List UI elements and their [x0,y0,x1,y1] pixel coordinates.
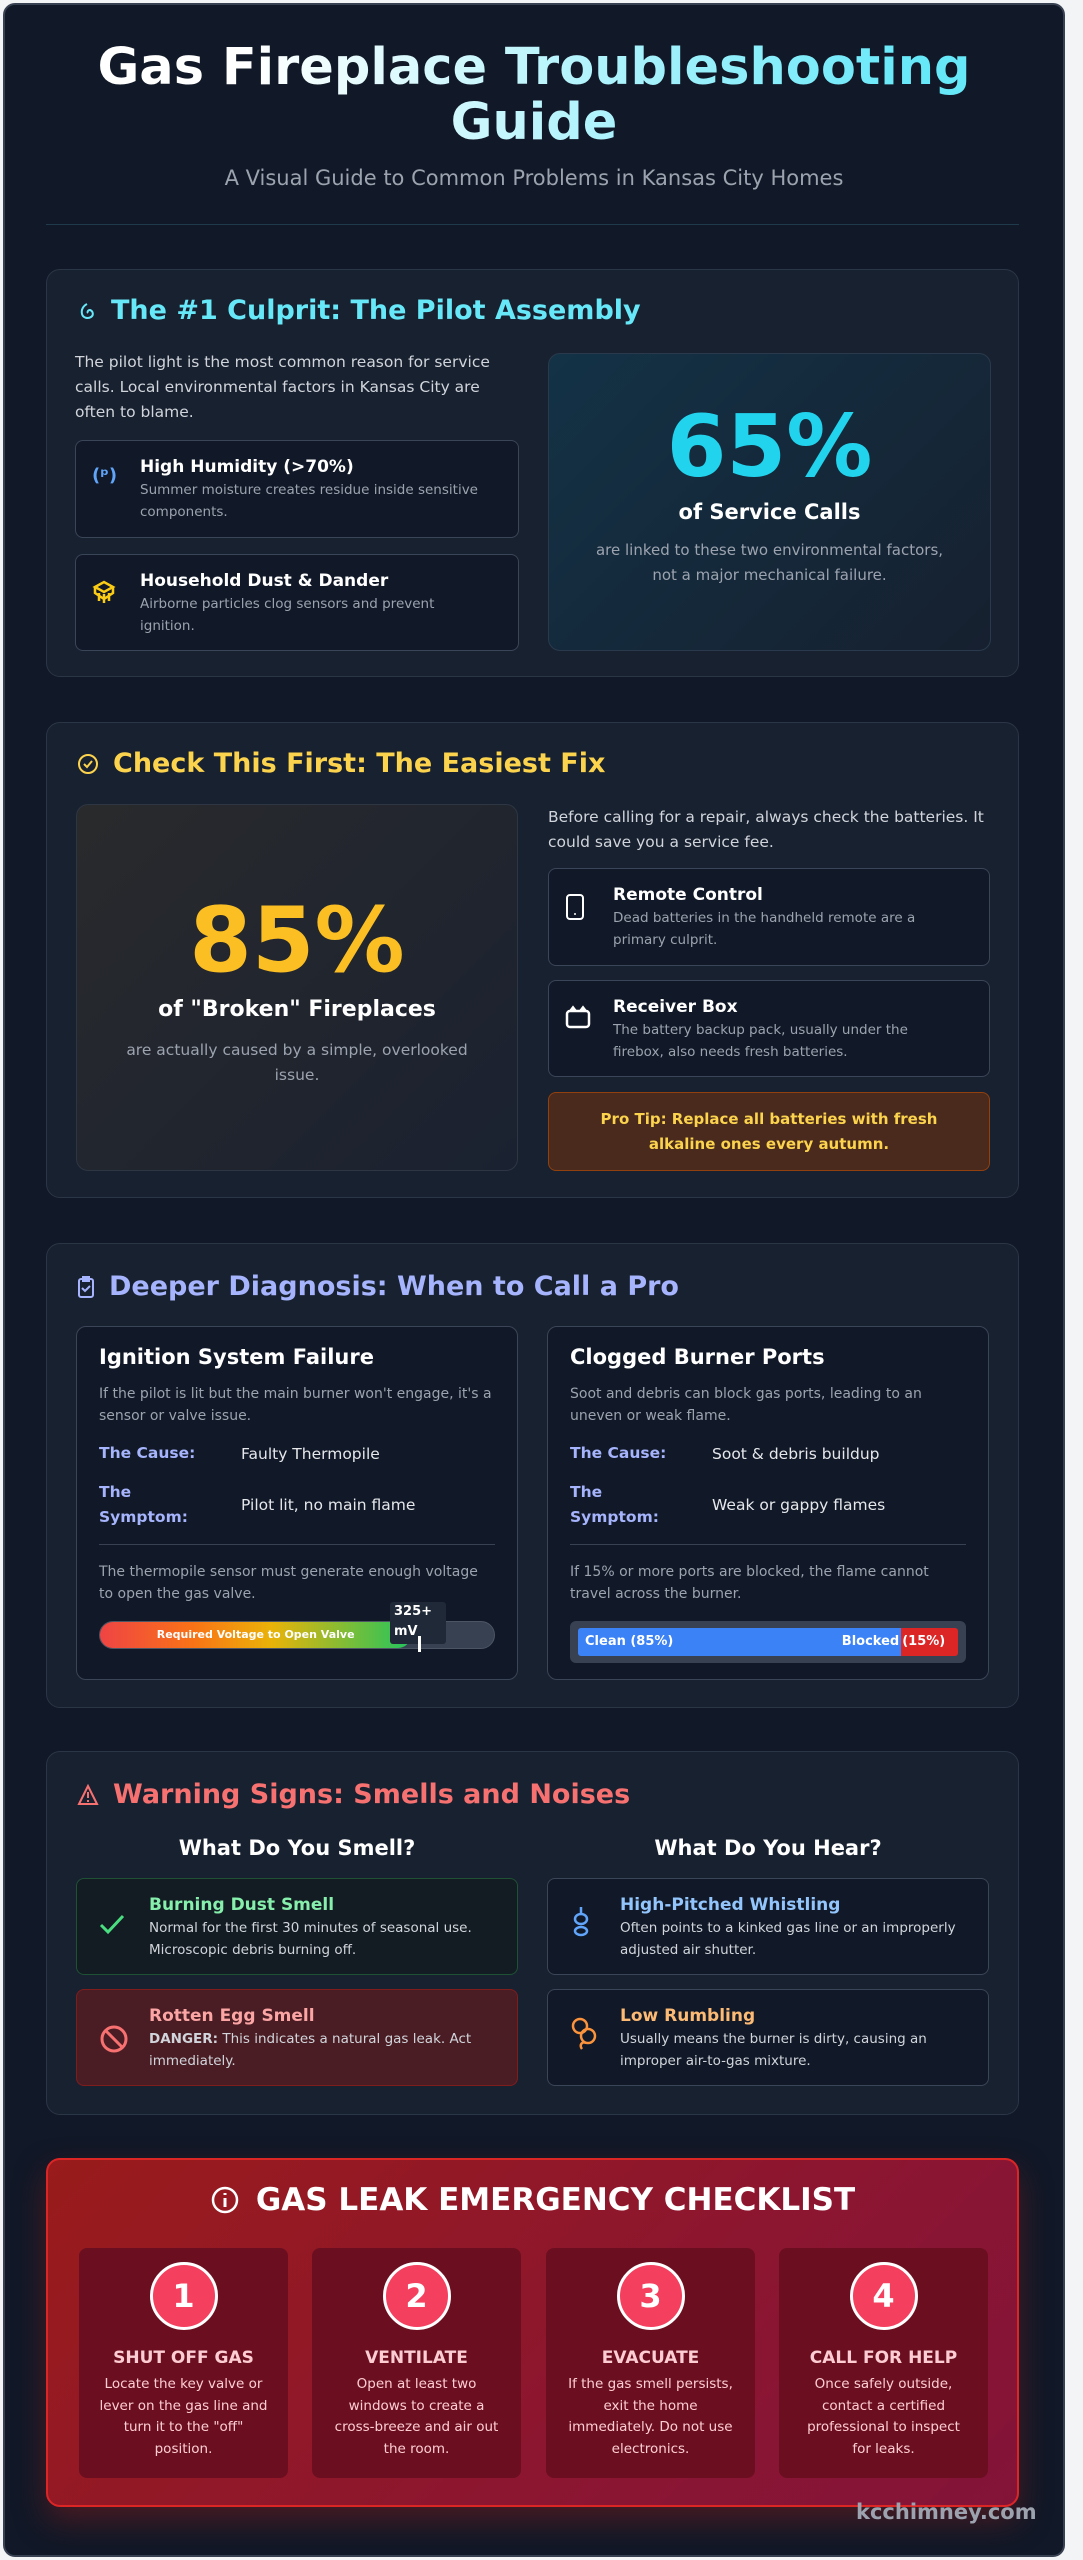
step 4: 4 [872,2277,895,2315]
chart: port blockage bar: (15%) [902,1634,945,1649]
subheading: hear: What Do You Hear? [654,1836,882,1860]
card: dust: Airborne particles clog sensors and prevent ignition. [140,596,434,634]
heading: deeper diagnosis: Deeper Diagnosis: When to Call a Pro [109,1271,679,1302]
card: clogged burner: Symptom: [570,1508,659,1526]
card: humidity: High Humidity (>70%) [140,457,354,477]
card: dust: Household Dust & Dander [140,571,388,591]
card: rotten egg: Rotten Egg Smell [149,2006,315,2026]
stat: 85%: 85% [189,888,405,993]
card: ignition failure: If the pilot is lit but the main burner won't engage, it's a sensor or valve issue. [99,1386,492,1424]
card: rumbling: Low Rumbling [620,2006,755,2026]
callout: pro tip: Pro Tip: Replace all batteries with fresh [601,1110,937,1128]
step 1: Locate the key valve or lever on the gas line and turn it to the "off" position. [100,2376,267,2456]
card: remote: Remote Control [613,885,763,905]
step 2 [312,2248,521,2478]
heading: emergency: GAS LEAK EMERGENCY CHECKLIST [256,2182,855,2218]
intro text: The pilot light is the most common reason for service calls. Local environmental factors in Kansas City are often to blame. [75,353,490,421]
card: clogged burner: The Cause: [570,1444,666,1462]
card: receiver [548,980,990,1077]
icon: humidity: (ᵖ) [92,465,117,486]
stat: 65%: not a major mechanical failure. [652,566,887,584]
step 4 [779,2248,988,2478]
heading: pilot assembly: The #1 Culprit: The Pilot Assembly [111,295,641,326]
card: burning dust [76,1878,518,1975]
text: batteries intro: Before calling for a repair, always check the batteries. It could save you a service fee. [548,808,984,851]
icon: check [100,1915,124,1934]
step 2: 2 [405,2277,428,2315]
step 2: Open at least two windows to create a cross-breeze and air out the room. [335,2376,498,2456]
card: clogged burner: If 15% or more ports are blocked, the flame cannot travel across the burner. [570,1564,929,1602]
watermark: kcchimney.com [856,2500,1037,2524]
callout: pro tip [548,1092,990,1171]
title [60,40,1008,150]
icon: rumble [572,2018,596,2050]
card: whistling [547,1878,989,1975]
card: humidity [75,440,519,538]
icon: prohibited [100,2026,128,2052]
card: remote: Dead batteries in the handheld remote are a primary culprit. [613,910,915,948]
stat: 85%: of "Broken" Fireplaces [158,997,436,1022]
step 3: 3 [639,2277,662,2315]
icon: whistle [574,1907,588,1936]
card: dust [75,554,519,651]
icon: remote [566,894,584,920]
stat: 65%: of Service Calls [679,500,860,524]
card: ignition failure: 325+ [394,1604,432,1619]
card: clogged burner: Soot & debris buildup [712,1444,880,1462]
stat: 85%: are actually caused by a simple, overlooked issue. [126,1041,468,1084]
card: ignition failure: Faulty Thermopile [241,1444,380,1462]
chart: port blockage bar [570,1621,966,1663]
heading: warning signs: Warning Signs: Smells and Noises [113,1779,630,1810]
subtitle: A Visual Guide to Common Problems in Kansas City Homes [225,166,843,190]
card: whistling: High-Pitched Whistling [620,1895,840,1915]
step 1: SHUT OFF GAS [113,2348,254,2368]
step 1: 1 [172,2277,195,2315]
panel: easiest fix [46,722,1019,1198]
panel: deeper diagnosis [46,1243,1019,1708]
heading: easiest fix: Check This First: The Easiest Fix [113,748,605,779]
stat: 65%: are linked to these two environmental factors, [596,541,943,559]
subheading: smell: What Do You Smell? [179,1836,415,1860]
card: remote [548,868,990,966]
panel: emergency checklist [46,2158,1019,2507]
stat: 65% [548,353,991,651]
step 4: CALL FOR HELP [810,2348,957,2368]
card: clogged burner: Clogged Burner Ports [570,1345,825,1369]
step 1 [79,2248,288,2478]
stat: 65%: 65% [667,397,872,497]
title: Gas Fireplace Troubleshooting [97,38,971,97]
card: ignition failure: Ignition System Failure [99,1345,374,1369]
chart: port blockage bar: Clean (85%) [585,1634,673,1649]
chart: port blockage bar: Blocked [842,1634,899,1649]
card: whistling: Often points to a kinked gas line or an improperly adjusted air shutter. [620,1920,956,1958]
title: Guide [451,93,617,152]
card: rotten egg: DANGER: This indicates a natural gas leak. Act immediately. [149,2031,471,2069]
chart: voltage bar: Required Voltage to Open Valve [157,1628,355,1641]
card: clogged burner: Soot and debris can block gas ports, leading to an uneven or weak flame. [570,1386,922,1424]
card: ignition failure: The Cause: [99,1444,195,1462]
icon: receiver [566,1006,590,1028]
card: ignition failure [76,1326,518,1680]
step 3: EVACUATE [602,2348,699,2368]
step 3: If the gas smell persists, exit the home immediately. Do not use electronics. [568,2376,733,2456]
step 4: Once safely outside, contact a certified professional to inspect for leaks. [807,2376,960,2456]
card: burning dust: Normal for the first 30 minutes of seasonal use. Microscopic debris burning off. [149,1920,472,1958]
card: ignition failure: Symptom: [99,1508,188,1526]
card: receiver: Receiver Box [613,997,738,1017]
panel: warning signs [46,1751,1019,2115]
card: humidity: Summer moisture creates residue inside sensitive components. [140,482,478,520]
card: clogged burner [547,1326,989,1680]
chart: voltage bar [99,1621,495,1649]
chart: voltage bar: mV [394,1624,418,1639]
step 2: VENTILATE [365,2348,468,2368]
card: rumbling [547,1989,989,2086]
card: receiver: The battery backup pack, usually under the firebox, also needs fresh batteries. [613,1022,908,1060]
card: clogged burner: Weak or gappy flames [712,1496,885,1514]
card: ignition failure: Pilot lit, no main flame [241,1496,415,1514]
step 3 [546,2248,755,2478]
card: ignition failure: The thermopile sensor must generate enough voltage to open the gas valve. [99,1564,478,1602]
card: ignition failure: The [99,1483,131,1501]
card: clogged burner: The [570,1483,602,1501]
icon: dust [92,580,116,603]
callout: pro tip: alkaline ones every autumn. [649,1135,889,1153]
card: burning dust: Burning Dust Smell [149,1895,334,1915]
panel: pilot assembly [46,269,1019,677]
card: rumbling: Usually means the burner is dirty, causing an improper air-to-gas mixture. [620,2031,927,2069]
stat: 85% [76,804,518,1171]
card: rotten egg [76,1989,518,2086]
